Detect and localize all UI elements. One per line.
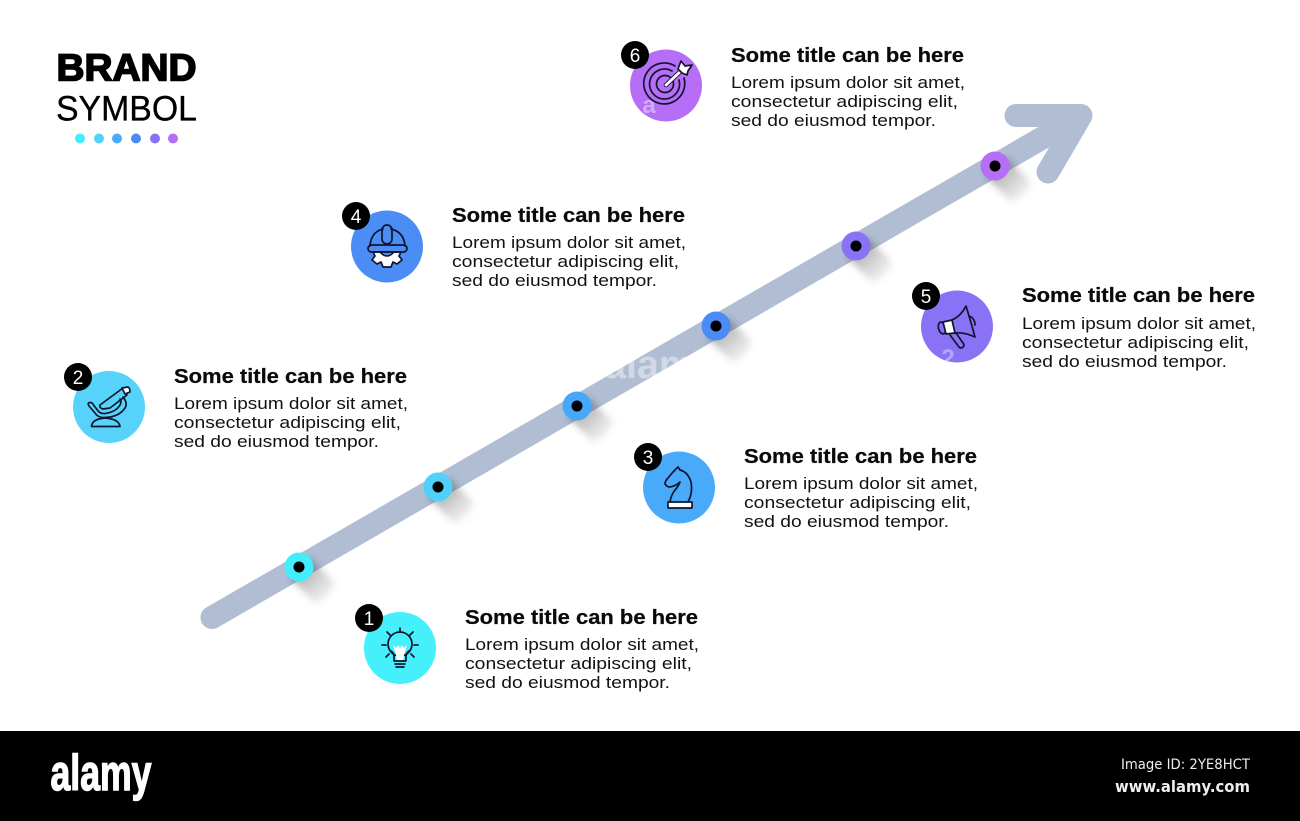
logo: brand symbol: BRAND: [56, 48, 196, 90]
step 1: Lorem ipsum dolor sit amet,: [465, 635, 699, 654]
logo: brand symbol: [56, 48, 197, 144]
step 6: consectetur adipiscing elit,: [731, 92, 958, 111]
step 4: Some title can be here: [452, 204, 685, 227]
step 1: consectetur adipiscing elit,: [465, 654, 692, 673]
icon: light bulb: [382, 628, 418, 667]
step 2: Lorem ipsum dolor sit amet,: [174, 394, 408, 413]
step 6: Lorem ipsum dolor sit amet,: [731, 73, 965, 92]
step 3: Some title can be here: [744, 445, 977, 468]
step 1: Some title can be here: [465, 606, 698, 629]
footer bar: [0, 731, 1300, 821]
step 1: sed do eiusmod tempor.: [465, 673, 670, 692]
step 2: 2: [73, 368, 83, 389]
step 3: 3: [643, 448, 653, 469]
arrow: rising diagonal timeline: [212, 116, 1081, 618]
step 1: 1: [364, 609, 374, 630]
icon: microscope: [88, 387, 130, 426]
logo: brand symbol: SYMBOL: [56, 90, 197, 128]
icon: target with dart: a: [642, 92, 656, 119]
step 3: Lorem ipsum dolor sit amet,: [744, 474, 978, 493]
step 6: [621, 41, 965, 130]
step 4: [342, 202, 686, 290]
step 5: 5: [921, 287, 931, 308]
step 6: 6: [630, 46, 640, 67]
step 5: [912, 282, 1256, 372]
step 2: sed do eiusmod tempor.: [174, 432, 379, 451]
icon: target with dart: [642, 61, 692, 119]
step 2: consectetur adipiscing elit,: [174, 413, 401, 432]
footer logo: alamy: alamy: [50, 745, 152, 801]
step 4: Lorem ipsum dolor sit amet,: [452, 233, 686, 252]
icon: megaphone: 2: [941, 345, 955, 372]
step 1: [355, 604, 699, 692]
icon: helmet and gear: [368, 225, 407, 267]
step 6: sed do eiusmod tempor.: [731, 111, 936, 130]
step 3: sed do eiusmod tempor.: [744, 512, 949, 531]
step 5: consectetur adipiscing elit,: [1022, 333, 1249, 352]
timeline markers: [284, 152, 1031, 603]
icon: chess knight: [665, 467, 692, 508]
step 5: Some title can be here: [1022, 284, 1255, 307]
step 2: [64, 363, 408, 451]
watermark on arrow: alamy: [604, 343, 717, 387]
step 4: 4: [351, 207, 362, 228]
step 2: Some title can be here: [174, 365, 407, 388]
step 4: consectetur adipiscing elit,: [452, 252, 679, 271]
icon: megaphone: [937, 306, 975, 372]
step 6: Some title can be here: [731, 44, 964, 67]
step 3: [634, 443, 978, 531]
footer url: www.alamy.com: [1115, 777, 1250, 796]
footer image id: Image ID: 2YE8HCT: [1121, 757, 1250, 773]
step 5: sed do eiusmod tempor.: [1022, 352, 1227, 371]
step 4: sed do eiusmod tempor.: [452, 271, 657, 290]
step 3: consectetur adipiscing elit,: [744, 493, 971, 512]
step 5: Lorem ipsum dolor sit amet,: [1022, 314, 1256, 333]
